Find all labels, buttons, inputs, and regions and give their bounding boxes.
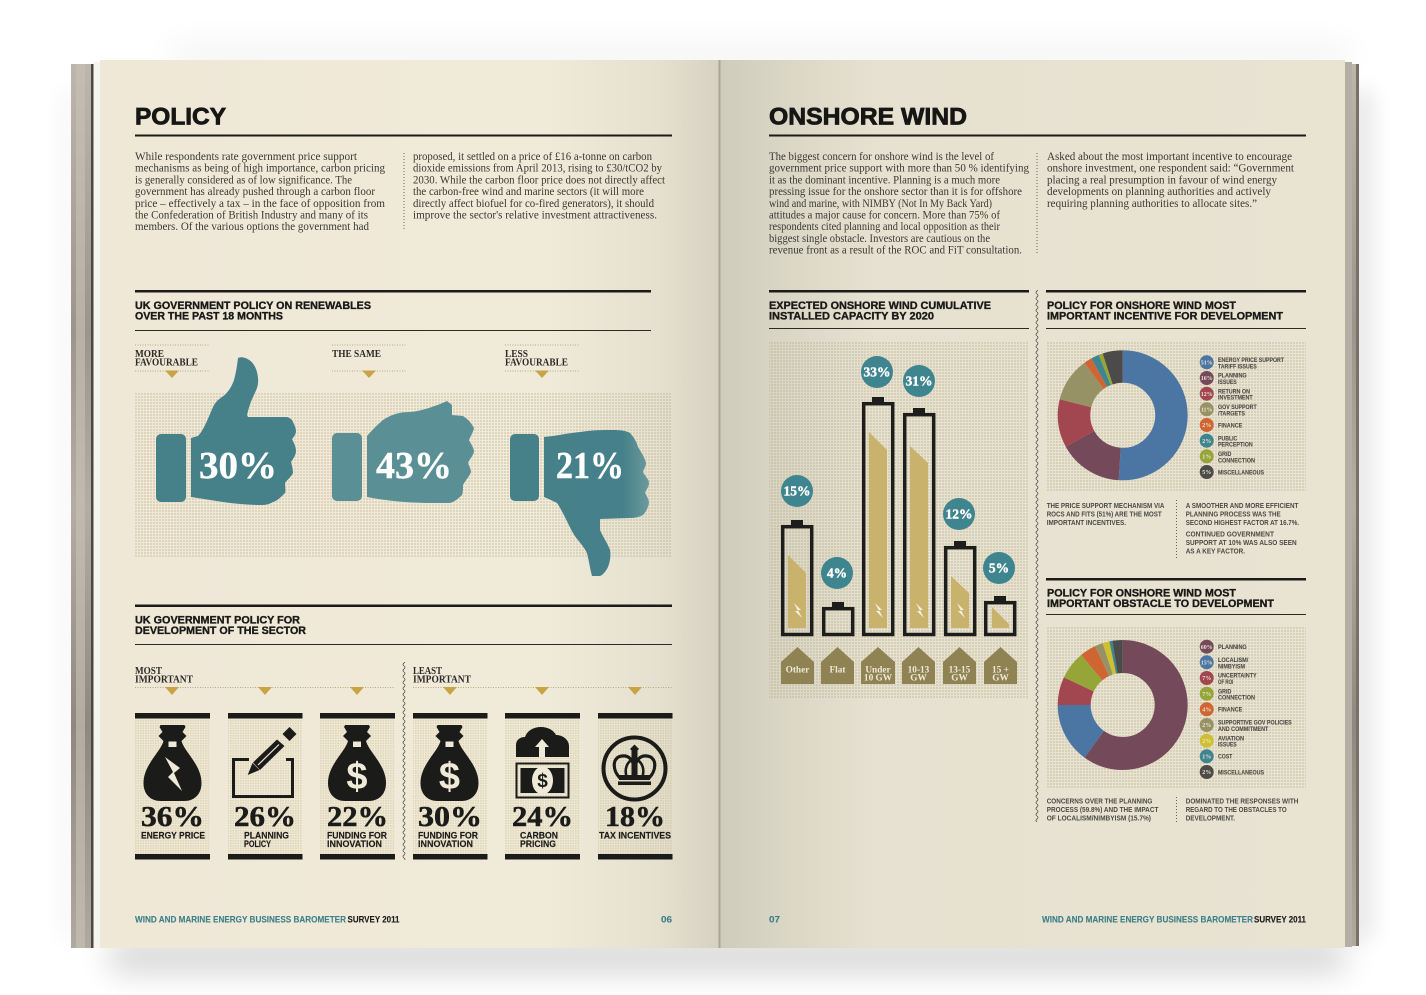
label: the same — [332, 345, 407, 378]
legend: incentives: /TARGETS — [1218, 410, 1245, 417]
section heading: policy on renewables: UK GOVERNMENT POLICY ON RENEWABLES — [135, 300, 371, 312]
legend: obstacles: UNCERTAINTY — [1218, 673, 1257, 680]
bar: other 15%: 15% — [784, 484, 810, 498]
icon: cloud and banknote: $ — [537, 771, 548, 792]
intro text, two columns: revenue front as a result of the ROC and FiT consultation. — [769, 245, 1022, 257]
caption: obstacles — [1047, 796, 1298, 824]
label: less favourable: FAVOURABLE — [505, 358, 568, 368]
caption: incentives: SUPPORT AT 10% WAS ALSO SEEN — [1186, 538, 1297, 547]
section heading: development of the sector: DEVELOPMENT OF THE SECTOR — [135, 625, 306, 637]
card: tax incentives 18%: TAX INCENTIVES — [599, 830, 671, 840]
intro text, two columns: proposed, it settled on a price of £16 a-tonne on carbon — [413, 151, 652, 163]
label: most important: MOST — [135, 666, 162, 677]
legend: incentives: ENERGY PRICE SUPPORT — [1218, 357, 1284, 364]
intro text, two columns: is generally considered as of low significance. The — [135, 174, 352, 186]
legend: incentives: 16% — [1201, 376, 1213, 382]
legend: incentives: GOV SUPPORT — [1218, 404, 1257, 411]
icon: money bag with dollar — [328, 725, 386, 801]
icon: flat thumb 43%: 43% — [376, 445, 452, 487]
left page — [100, 60, 720, 948]
legend: incentives: MISCELLANEOUS — [1218, 469, 1264, 476]
legend: incentives: 2% — [1202, 423, 1211, 429]
footer: right page: 07 — [769, 914, 780, 924]
caption: incentives: THE PRICE SUPPORT MECHANISM VIA — [1047, 501, 1164, 510]
caption: incentives: AS A KEY FACTOR. — [1186, 547, 1245, 556]
card: planning policy 26%: POLICY — [244, 839, 271, 849]
card: funding for innovation 22%: FUNDING FOR — [327, 830, 387, 840]
bar: 10-13 GW 31%: 10-13 — [908, 666, 930, 676]
label: the same: THE SAME — [332, 349, 381, 360]
intro text, two columns: wind and marine, with NIMBY (Not In My Back Yard) — [769, 198, 992, 210]
bar: 15+ GW 5%: GW — [992, 674, 1009, 684]
caption: obstacles: REGARD TO THE OBSTACLES TO — [1186, 805, 1287, 814]
bar: 10-13 GW 31%: GW — [910, 674, 927, 684]
legend: obstacles: 7% — [1202, 692, 1211, 698]
intro text, two columns: price – effectively a tax – in the face of opposition from — [135, 198, 385, 210]
intro text, two columns: 2030. While the carbon floor price does not directly affect — [413, 174, 666, 186]
section heading: expected capacity: INSTALLED CAPACITY BY 2020 — [769, 310, 934, 322]
caption: incentives: IMPORTANT INCENTIVES. — [1047, 518, 1126, 527]
legend: obstacles: ISSUES — [1218, 742, 1237, 749]
battery bar chart — [769, 342, 1029, 699]
card: energy price 36% — [135, 713, 210, 860]
caption: obstacles: PROCESS (59.8%) AND THE IMPACT — [1047, 805, 1159, 814]
intro text, two columns — [769, 151, 1295, 257]
intro text, two columns: requiring planning authorities to allocate sites.” — [1047, 198, 1257, 210]
legend: obstacles: AND COMMITMENT — [1218, 726, 1268, 733]
label: least important: LEAST — [413, 666, 442, 677]
legend: incentives: PERCEPTION — [1218, 442, 1253, 449]
bar: flat 4%: 4% — [827, 566, 847, 580]
caption: obstacles: OF LOCALISM/NIMBYISM (15.7%) — [1047, 814, 1152, 823]
bar: under 10 GW 33% — [861, 356, 895, 684]
card: funding for innovation 22%: 22% — [327, 802, 388, 833]
label: most important: IMPORTANT — [135, 674, 193, 686]
legend: obstacles: 7% — [1202, 676, 1211, 682]
intro text, two columns: the carbon-free wind and marine sectors (it will more — [413, 186, 644, 198]
donut chart: incentives — [1074, 367, 1171, 464]
card: planning policy 26%: 26% — [234, 802, 296, 833]
section heading: expected capacity — [769, 290, 1029, 329]
legend: obstacles: 1% — [1202, 754, 1211, 760]
footer: left page: 06 — [661, 914, 672, 924]
legend: incentives: PLANNING — [1218, 373, 1247, 380]
caption: incentives — [1047, 500, 1299, 558]
card: funding for innovation 30% — [413, 713, 488, 860]
legend: incentives: 12% — [1201, 392, 1213, 398]
card: funding for innovation 30%: FUNDING FOR — [418, 830, 478, 840]
legend: obstacles: 2% — [1202, 770, 1211, 776]
intro text, two columns: attitudes a major cause for concern. More than 75% of — [769, 210, 1000, 222]
footer: left page — [135, 914, 672, 924]
legend: incentives: 11% — [1201, 408, 1213, 414]
label: least important: IMPORTANT — [413, 674, 471, 686]
icon: flat thumb 43% — [332, 401, 474, 503]
dotted panel behind obstacle donut — [1046, 627, 1306, 788]
intro text, two columns: the Confederation of British Industry and many of its — [135, 210, 368, 222]
label: least important — [413, 666, 672, 695]
legend: obstacles: 2% — [1202, 723, 1211, 729]
legend: obstacles: OF ROI — [1218, 679, 1233, 686]
legend: obstacles: GRID — [1218, 688, 1231, 695]
footer: right page — [769, 914, 1306, 924]
donut chart: obstacles — [1074, 656, 1171, 754]
card: tax incentives 18%: 18% — [605, 802, 665, 833]
label: less favourable — [505, 345, 580, 378]
legend: obstacles: PLANNING — [1218, 644, 1247, 651]
card: energy price 36%: 36% — [141, 802, 204, 833]
caption: incentives: SECOND HIGHEST FACTOR AT 16.7%. — [1186, 518, 1299, 527]
dotted panel behind thumbs — [135, 392, 672, 558]
legend: obstacles: 60% — [1201, 645, 1213, 651]
section heading: obstacle to development: POLICY FOR ONSHORE WIND MOST — [1047, 588, 1236, 600]
section heading: expected capacity: EXPECTED ONSHORE WIND CUMULATIVE — [769, 300, 991, 312]
bar: 15+ GW 5%: 15 + — [992, 666, 1009, 676]
intro text, two columns: government price support with more than 50 % identifying — [769, 163, 1029, 175]
intro text, two columns: mechanisms as being of high importance, carbon pricing — [135, 163, 385, 175]
section heading: obstacle to development: IMPORTANT OBSTACLE TO DEVELOPMENT — [1047, 598, 1274, 610]
icon: thumbs up 30%: 30% — [199, 445, 277, 487]
bar: 15+ GW 5%: 5% — [989, 560, 1009, 576]
legend: incentives: 2% — [1202, 439, 1211, 445]
legend: incentives: RETURN ON — [1218, 388, 1250, 395]
bar: 15+ GW 5% — [983, 552, 1017, 684]
icon: money bag with dollar — [420, 725, 478, 801]
intro text, two columns: placing a real presumption in favour of wind energy — [1047, 174, 1277, 186]
intro text, two columns: pressing issue for the onshore sector than it is for offshore — [769, 186, 1022, 198]
intro text, two columns: improve the sector's relative investment attractiveness. — [413, 210, 657, 222]
legend: obstacles: CONNECTION — [1218, 695, 1255, 702]
icon: money bag with bolt — [144, 725, 202, 801]
legend: incentives: FINANCE — [1218, 422, 1243, 429]
card: carbon pricing 24%: PRICING — [520, 839, 556, 849]
legend: incentives: 1% — [1202, 454, 1211, 460]
bar: under 10 GW 33%: Under — [865, 666, 891, 676]
section heading: policy on renewables: OVER THE PAST 18 MONTHS — [135, 310, 283, 322]
legend: obstacles: 15% — [1201, 660, 1213, 666]
bar: 10-13 GW 31% — [902, 365, 935, 684]
intro text, two columns — [135, 151, 666, 233]
bar: 13-15 GW 12%: 12% — [946, 506, 972, 522]
icon: money bag with dollar: $ — [439, 756, 460, 798]
bar: other 15%: Other — [786, 666, 809, 676]
card: funding for innovation 22% — [320, 713, 395, 860]
footer: left page: SURVEY 2011 — [348, 914, 400, 924]
section heading: obstacle to development — [1046, 578, 1306, 615]
legend: incentives: 5% — [1202, 470, 1211, 476]
legend: incentives: TARIFF ISSUES — [1218, 363, 1257, 370]
page heading: policy: POLICY — [135, 104, 226, 130]
legend: incentives: GRID — [1218, 451, 1231, 458]
intro text, two columns: government has already pushed through a carbon floor — [135, 186, 375, 198]
intro text, two columns: While respondents rate government price support — [135, 151, 358, 163]
caption: obstacles: DEVELOPMENT. — [1186, 814, 1235, 823]
icon: thumbs down 21% — [510, 430, 649, 576]
label: most important — [135, 666, 395, 695]
intro text, two columns: onshore investment, one respondent said: “Government — [1047, 163, 1295, 175]
icon: thumbs up 30% — [156, 357, 296, 505]
label: less favourable: LESS — [505, 349, 528, 360]
legend: incentives: 51% — [1201, 360, 1213, 366]
legend: obstacles — [1200, 640, 1292, 779]
intro text, two columns: Asked about the most important incentive to encourage — [1047, 151, 1292, 163]
intro text, two columns: dioxide emissions from April 2013, rising to £30/tCO2 by — [413, 163, 662, 175]
section heading: development of the sector — [135, 604, 672, 645]
legend: incentives: CONNECTION — [1218, 457, 1255, 464]
legend: obstacles: LOCALISM/ — [1218, 657, 1248, 664]
caption: incentives: A SMOOTHER AND MORE EFFICIENT — [1186, 501, 1299, 510]
card: carbon pricing 24% — [505, 713, 580, 860]
card: tax incentives 18% — [598, 713, 672, 860]
bar: flat 4%: Flat — [829, 666, 846, 676]
section heading: incentive for development: POLICY FOR ONSHORE WIND MOST — [1047, 300, 1236, 312]
intro text, two columns: respondents cited planning and local opposition as their — [769, 221, 1000, 233]
intro text, two columns: members. Of the various options the government had — [135, 221, 369, 233]
legend: obstacles: MISCELLANEOUS — [1218, 769, 1264, 776]
footer: left page: WIND AND MARINE ENERGY BUSINESS BAROMETER — [135, 914, 346, 924]
legend: obstacles: SUPPORTIVE GOV POLICIES — [1218, 720, 1292, 727]
bar: under 10 GW 33%: 33% — [864, 364, 890, 380]
caption: obstacles: CONCERNS OVER THE PLANNING — [1047, 796, 1153, 806]
label: more favourable: FAVOURABLE — [135, 358, 198, 368]
footer: right page: WIND AND MARINE ENERGY BUSINESS BAROMETER — [1042, 914, 1253, 924]
legend: incentives — [1200, 355, 1284, 479]
intro text, two columns: biggest single obstacle. Investors are cautious on the — [769, 233, 990, 245]
label: more favourable — [135, 345, 210, 378]
legend: obstacles: AVIATION — [1218, 735, 1244, 742]
icon: thumbs down 21%: 21% — [556, 445, 624, 487]
label: more favourable: MORE — [135, 349, 164, 360]
card: funding for innovation 30%: INNOVATION — [418, 839, 473, 849]
bar: flat 4% — [821, 557, 854, 684]
bar: other 15% — [781, 475, 814, 684]
icon: cloud and banknote — [516, 727, 569, 798]
legend: incentives: INVESTMENT — [1218, 395, 1253, 402]
footer: right page: SURVEY 2011 — [1254, 914, 1306, 924]
card: funding for innovation 30%: 30% — [418, 802, 482, 833]
intro text, two columns: developments on planning authorities and actively — [1047, 186, 1271, 198]
intro text, two columns: directly affect biofuel for co-fired generators), it should — [413, 198, 654, 210]
section heading: incentive for development: IMPORTANT INCENTIVE FOR DEVELOPMENT — [1047, 310, 1283, 322]
legend: obstacles: NIMBYISM — [1218, 663, 1245, 670]
caption: incentives: CONTINUED GOVERNMENT — [1186, 530, 1275, 538]
legend: obstacles: 2% — [1202, 739, 1211, 745]
page heading: onshore wind: ONSHORE WIND — [769, 104, 967, 130]
card: carbon pricing 24%: CARBON — [520, 830, 558, 840]
caption: obstacles: DOMINATED THE RESPONSES WITH — [1186, 796, 1298, 806]
card: energy price 36%: ENERGY PRICE — [141, 830, 205, 840]
intro text, two columns: The biggest concern for onshore wind is the level of — [769, 151, 994, 163]
section heading: policy on renewables — [135, 290, 651, 331]
caption: incentives: PLANNING PROCESS WAS THE — [1186, 510, 1281, 519]
bar: under 10 GW 33%: 10 GW — [864, 674, 893, 684]
legend: incentives: ISSUES — [1218, 379, 1237, 386]
legend: obstacles: FINANCE — [1218, 707, 1243, 714]
section heading: development of the sector: UK GOVERNMENT POLICY FOR — [135, 614, 300, 626]
icon: crown in circle — [604, 738, 666, 800]
dotted panel behind incentive donut — [1046, 342, 1306, 491]
bar: 13-15 GW 12% — [943, 498, 976, 684]
caption: incentives: ROCS AND FITS (51%) ARE THE MOST — [1047, 510, 1162, 519]
section heading: incentive for development — [1046, 290, 1306, 329]
legend: obstacles: 4% — [1202, 708, 1211, 714]
legend: obstacles: COST — [1218, 754, 1232, 761]
card: funding for innovation 22%: INNOVATION — [327, 839, 382, 849]
intro text, two columns: it as the dominant incentive. Planning is a much more — [769, 174, 1000, 186]
card: planning policy 26%: PLANNING — [244, 830, 289, 840]
legend: incentives: PUBLIC — [1218, 435, 1237, 442]
card: carbon pricing 24%: 24% — [512, 802, 573, 833]
icon: money bag with dollar: $ — [346, 756, 368, 798]
right page — [718, 60, 1345, 948]
icon: pencil and box — [234, 727, 296, 796]
bar: 13-15 GW 12%: 13-15 — [949, 666, 971, 676]
bar: 13-15 GW 12%: GW — [951, 674, 968, 684]
card: planning policy 26% — [228, 713, 302, 860]
bar: 10-13 GW 31%: 31% — [906, 374, 932, 388]
